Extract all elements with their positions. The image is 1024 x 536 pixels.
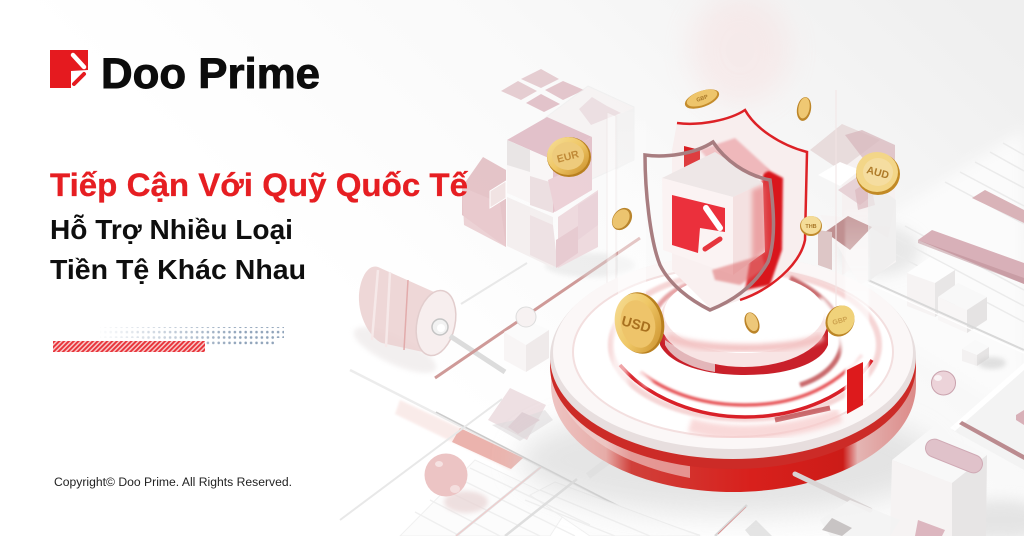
coin: bottom small xyxy=(742,310,762,336)
subtitle line 2: Tiền Tệ Khác Nhau xyxy=(50,254,306,285)
red floor line xyxy=(959,421,1024,460)
stairs xyxy=(400,460,700,536)
decorative hatched bar xyxy=(53,341,205,352)
glass rods xyxy=(340,399,502,520)
coin: top xyxy=(682,85,722,113)
copyright: Copyright© Doo Prime. All Rights Reserved. xyxy=(54,477,292,489)
lower cube xyxy=(507,197,553,268)
big pink sphere xyxy=(424,454,488,513)
sphere right xyxy=(932,371,956,395)
light column: glass panels and glow xyxy=(612,0,869,414)
wordmark: Doo Prime xyxy=(101,50,320,98)
coin: THB xyxy=(800,216,822,236)
long red rod xyxy=(435,238,640,378)
pink pill xyxy=(923,436,985,476)
glass cube stack xyxy=(462,69,635,300)
subtitle line 1: Hỗ Trợ Nhiều Loại xyxy=(50,214,293,245)
coin: EUR: EUR xyxy=(556,148,581,166)
bottom glass pieces xyxy=(820,500,945,536)
coin: USD: USD xyxy=(620,312,653,336)
floor step white xyxy=(952,365,1024,470)
bottom right big white cube xyxy=(890,427,987,536)
logo mark xyxy=(50,50,88,88)
logo on cube xyxy=(672,195,725,253)
glass cylinder xyxy=(348,263,527,382)
shield front glass xyxy=(645,142,774,310)
red column xyxy=(847,362,863,414)
coin: left small xyxy=(608,204,636,234)
logo xyxy=(50,50,320,98)
upper cube xyxy=(507,117,592,160)
top tile layer xyxy=(501,69,621,125)
coin: top: GBP xyxy=(696,94,709,104)
shield back xyxy=(672,110,807,310)
glass cube stack right xyxy=(810,124,896,285)
coin: THB: THB xyxy=(805,224,817,230)
floor decor: right side steps and blocks xyxy=(840,130,1024,536)
white block 2 xyxy=(938,283,987,333)
platform: outer disc xyxy=(518,255,938,515)
small white cube with glass ball xyxy=(504,307,549,372)
cube with logo xyxy=(662,152,767,285)
coin: AUD: AUD xyxy=(865,164,891,182)
floor decor: lower left lines, strip and stairs xyxy=(340,370,772,536)
small white block xyxy=(962,340,1006,369)
coin: GBP xyxy=(820,300,860,342)
coin: GBP: GBP xyxy=(832,316,849,327)
glass panel xyxy=(607,112,616,300)
decorative dot strip xyxy=(95,325,285,349)
coin: USD xyxy=(609,288,670,358)
platform: inner raised disc xyxy=(660,273,828,375)
coin: EUR xyxy=(547,137,591,177)
white rod on red base xyxy=(795,474,870,510)
bar: lower pink xyxy=(918,230,1024,284)
coin: top right xyxy=(795,96,813,122)
pink square glass xyxy=(488,388,546,440)
bar: upper pink xyxy=(972,190,1024,223)
title: Tiếp Cận Với Quỹ Quốc Tế xyxy=(50,167,468,203)
pink left block xyxy=(462,157,506,247)
white block 1 xyxy=(907,257,955,317)
platform: inner red ring xyxy=(611,271,879,432)
coin: AUD xyxy=(856,152,900,195)
thin glass rods xyxy=(868,280,1024,350)
